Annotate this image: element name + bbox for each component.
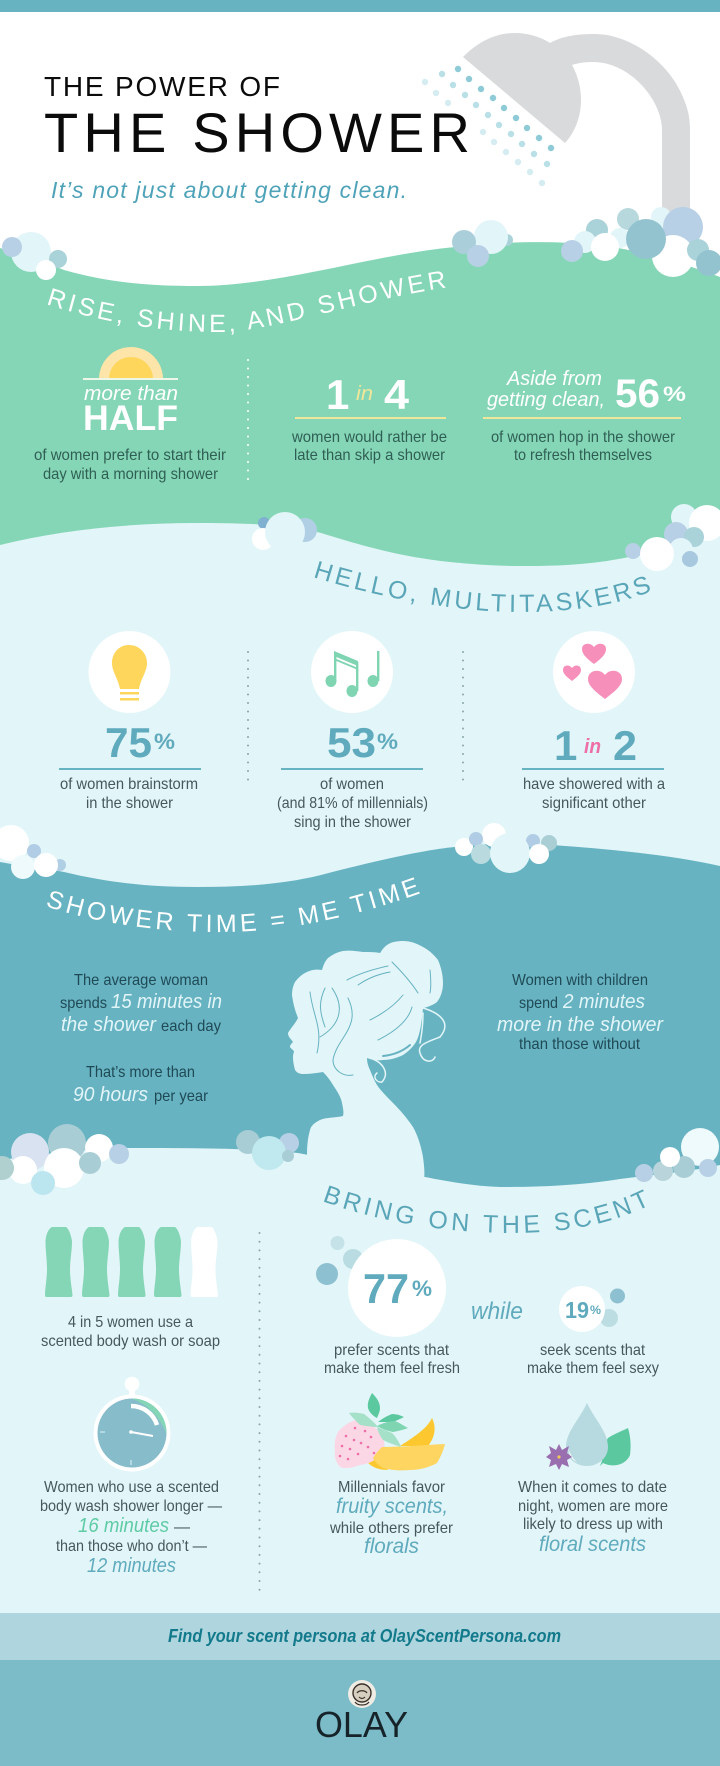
text: 4 in 5 women: 4 in 5 women use a [68,1314,193,1331]
stat: more than half: day with a morning shower [43,466,219,483]
stat: sing: of women [320,776,384,793]
stat: 1 in 4: 1 [326,371,349,418]
stat: sing [277,631,428,831]
stat: 19 percent: make them feel sexy [527,1360,659,1377]
stat: 77 percent [316,1236,460,1377]
header title: THE SHOWER [44,101,470,164]
stat: 56 percent: 56 [615,372,660,416]
header title [44,71,470,164]
text: date night [518,1479,668,1556]
stat: 56 percent [483,368,686,464]
bubbles: lower left [0,1124,129,1195]
header title: THE POWER OF [44,71,280,102]
text: scented body wash minutes: Women who use a scented [44,1479,219,1496]
text: average woman: spends [60,995,107,1012]
heading: bring on the scent: BRING ON THE SCENT [324,1186,645,1233]
text: average woman: 15 minutes in [111,991,222,1013]
text: 4 in 5 women [41,1314,220,1350]
text: scented body wash minutes: 12 minutes [87,1555,176,1577]
text: women with children: than those without [519,1036,641,1053]
bubbles: lower right [635,1128,719,1182]
text: millennials favor: fruity scents, [336,1495,448,1518]
text: date night: night, women are more [518,1498,668,1515]
text: average woman: each day [161,1018,221,1035]
stat: 1 in 2: 1 [554,722,577,769]
text: average woman: 90 hours [73,1084,148,1106]
footer brand band: OLAY [315,1704,408,1745]
bubbles: lower middle [236,1130,299,1170]
text: scented body wash minutes: 16 minutes [78,1515,169,1537]
text: women with children: Women with children [512,972,648,989]
stat: 56 percent: to refresh themselves [514,447,652,464]
stat: brainstorm: 75 [105,719,152,766]
text: average woman: The average woman [74,972,208,989]
stat: 1 in 2: 2 [613,722,637,769]
stat: 1 in 4: late than skip a shower [294,447,446,464]
stat: 19 percent: 19 [565,1297,589,1323]
icon: stopwatch [94,1377,170,1472]
text: millennials favor: Millennials favor [338,1479,446,1496]
stat: sing: 53 [327,719,376,766]
icon: five bottles chart [45,1227,218,1297]
heading: hello, multitaskers: HELLO, MULTITASKERS [314,561,650,612]
stat: 56 percent: % [663,383,686,406]
illustration: woman silhouette [288,941,445,1180]
text: 4 in 5 women: scented body wash or soap [41,1333,220,1350]
stat: brainstorm: % [154,729,175,754]
stat: more than half: HALF [83,399,178,438]
stat: 1 in 2: significant other [542,795,647,812]
bubbles: top middle [452,220,513,267]
panel: bring on the scent background wave [0,1148,720,1614]
text: average woman: That’s more than [86,1064,195,1081]
heading: shower time = me time: SHOWER TIME = ME TIME [47,877,420,932]
stat: 56 percent: Aside from [506,368,602,390]
text: while: while [471,1298,523,1325]
stat: brainstorm: in the shower [86,795,174,812]
text: average woman [60,972,222,1106]
icon: music notes [326,651,379,697]
footer call to action band: Find your scent persona at OlayScentPersona.com [168,1626,561,1646]
stat: brainstorm [59,631,201,812]
text: date night: When it comes to date [518,1479,667,1496]
icon: shower head [463,33,690,215]
heading: rise, shine, and shower: RISE, SHINE, AND SHOWER [48,272,446,335]
stat: more than half [34,347,227,483]
bubbles: green wave right [625,504,720,571]
text: millennials favor [329,1479,454,1558]
text: women with children: 2 minutes [562,991,645,1013]
stat: 19 percent: % [590,1303,601,1317]
stat: 19 percent: seek scents that [540,1342,645,1359]
text: scented body wash minutes: body wash shower longer — [40,1498,222,1515]
stat: more than half: more than [84,383,178,405]
bubbles: top right [561,207,720,277]
stat: 1 in 4: women would rather be [291,429,447,446]
icon: hearts [563,644,622,699]
icon: light bulb [112,645,147,700]
stat: 56 percent: of women hop in the shower [491,429,676,446]
icon: water droplets [422,66,554,186]
stat: 1 in 4: in [356,383,373,405]
stat: 1 in 2: in [584,736,601,758]
stat: sing: % [377,729,398,754]
stat: 77 percent: prefer scents that [334,1342,450,1359]
stat: 77 percent: make them feel fresh [324,1360,460,1377]
bubbles: green wave middle [252,512,317,552]
text: date night: floral scents [539,1533,646,1556]
stat: 77 percent: % [412,1276,432,1301]
icon: olay logo [348,1680,376,1708]
panel: multitaskers background wave [0,523,720,900]
text: women with children [497,972,664,1053]
stat: 1 in 2: have showered with a [523,776,665,793]
icon: water drop, leaf and flower [546,1403,631,1470]
stat: sing: sing in the shower [294,814,412,831]
icon: strawberry and mango [335,1393,445,1470]
stat: 1 in 2 [522,631,665,812]
text: average woman: per year [154,1088,209,1105]
stat: more than half: of women prefer to start their [34,447,227,464]
stat: sing: (and 81% of millennials) [277,795,428,812]
panel: rise, shine background wave [0,242,720,580]
text: scented body wash minutes: — [174,1519,190,1536]
stat: 19 percent [527,1286,659,1377]
text: date night: likely to dress up with [523,1516,663,1533]
subtitle: It’s not just about getting clean. [51,177,407,203]
text: women with children: spend [519,995,558,1012]
text: average woman: the shower [61,1014,157,1036]
stat: 1 in 4 [291,371,447,464]
panel: me time background wave [0,844,720,1195]
stat: 56 percent: getting clean, [487,389,605,411]
stat: brainstorm: of women brainstorm [60,776,198,793]
icon: sun [83,347,178,380]
bubbles: teal wave middle [455,823,557,873]
text: scented body wash minutes [40,1479,222,1577]
text: millennials favor: florals [364,1535,419,1558]
footer brand band [0,1660,720,1766]
bubbles: teal wave left [0,825,66,879]
stat: 77 percent: 77 [363,1265,409,1312]
bubbles: top left [2,232,67,280]
footer call to action band [0,1613,720,1660]
stat: 1 in 4: 4 [384,371,410,418]
text: millennials favor: while others prefer [329,1520,454,1537]
text: women with children: more in the shower [497,1014,664,1036]
text: scented body wash minutes: than those who don’t — [56,1538,207,1555]
